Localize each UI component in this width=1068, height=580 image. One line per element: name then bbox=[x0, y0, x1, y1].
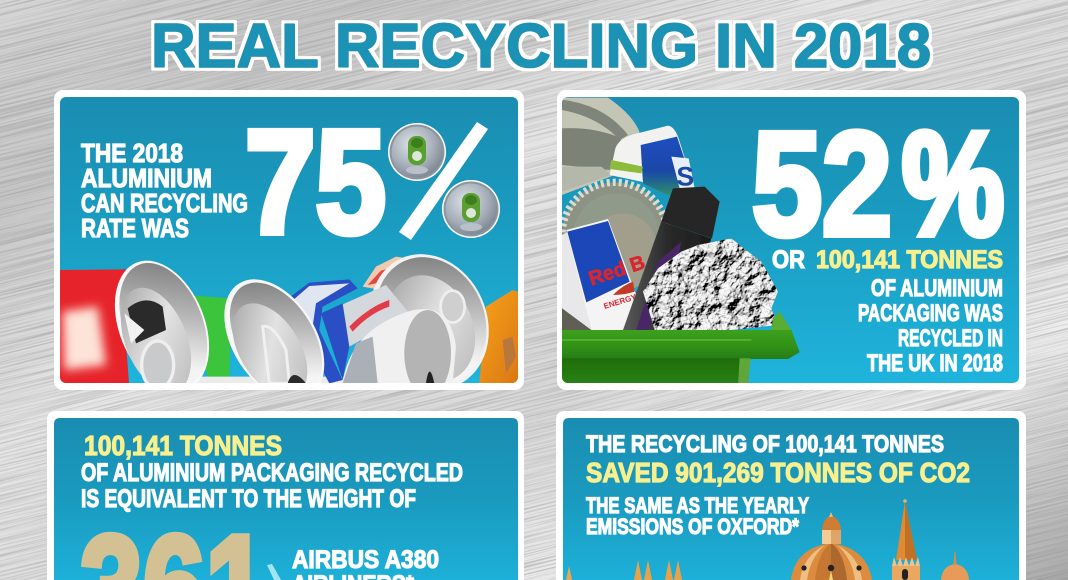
text: tonnes recycled bbox=[772, 246, 1003, 377]
panel: equivalent weight bbox=[47, 411, 524, 580]
statistic: 75 percent bbox=[247, 122, 488, 240]
statistic: 75 percent: 75 bbox=[245, 100, 386, 264]
icon: aircraft tail bbox=[267, 564, 281, 580]
statistic: 52 percent: 52 bbox=[752, 102, 892, 266]
photo: green bin with aluminium packaging: Red B bbox=[586, 252, 648, 290]
text: tonnes recycled: RECYCLED IN bbox=[898, 325, 1003, 352]
statistic: 52 percent bbox=[752, 102, 1004, 266]
text: CO2 saved: EMISSIONS OF OXFORD* bbox=[586, 514, 799, 539]
photo: crushed cans bbox=[60, 254, 518, 383]
panel: packaging recycled bbox=[557, 90, 1026, 390]
intro text: RATE WAS bbox=[81, 213, 189, 243]
text: tonnes recycled: OF ALUMINIUM bbox=[871, 275, 1003, 302]
icon: can top bbox=[388, 123, 446, 181]
statistic: 75 percent: % bbox=[397, 100, 493, 268]
statistic: 52 percent: % bbox=[902, 102, 1004, 265]
text: tonnes recycled: THE UK IN 2018 bbox=[867, 350, 1003, 377]
illustration: Oxford skyline bbox=[566, 499, 969, 580]
text: equivalent weight: OF ALUMINIUM PACKAGING RECYCLED bbox=[81, 459, 463, 487]
text: CO2 saved: SAVED 901,269 TONNES OF CO2 bbox=[586, 457, 970, 488]
photo: green bin with aluminium packaging: ENERGY bbox=[603, 292, 638, 311]
photo: green bin with aluminium packaging: S bbox=[676, 162, 694, 192]
photo: green bin with aluminium packaging bbox=[562, 98, 800, 385]
text: equivalent weight: IS EQUIVALENT TO THE WEIGHT OF bbox=[81, 485, 416, 513]
text: CO2 saved: THE SAME AS THE YEARLY bbox=[586, 493, 809, 518]
panel: aluminium can recycling rate bbox=[54, 90, 524, 419]
text: equivalent weight: 100,141 TONNES bbox=[84, 430, 282, 461]
text: tonnes recycled: OR bbox=[772, 246, 805, 274]
text: equivalent weight bbox=[81, 430, 463, 513]
intro text: THE 2018 bbox=[81, 138, 183, 168]
text: CO2 saved bbox=[586, 431, 970, 539]
panel: CO2 savings bbox=[556, 411, 1026, 580]
text: tonnes recycled: 100,141 TONNES bbox=[816, 246, 1003, 274]
intro text bbox=[81, 138, 248, 243]
icon: can top bbox=[442, 180, 500, 238]
intro text: ALUMINIUM bbox=[81, 163, 212, 193]
text: CO2 saved: THE RECYCLING OF 100,141 TONNES bbox=[586, 431, 944, 458]
text: tonnes recycled: PACKAGING WAS bbox=[858, 300, 1003, 327]
title: REAL RECYCLING IN 2018 bbox=[151, 12, 931, 81]
intro text: CAN RECYCLING bbox=[81, 188, 248, 218]
text: Airbus A380 airliners: AIRBUS A380 bbox=[292, 546, 439, 574]
